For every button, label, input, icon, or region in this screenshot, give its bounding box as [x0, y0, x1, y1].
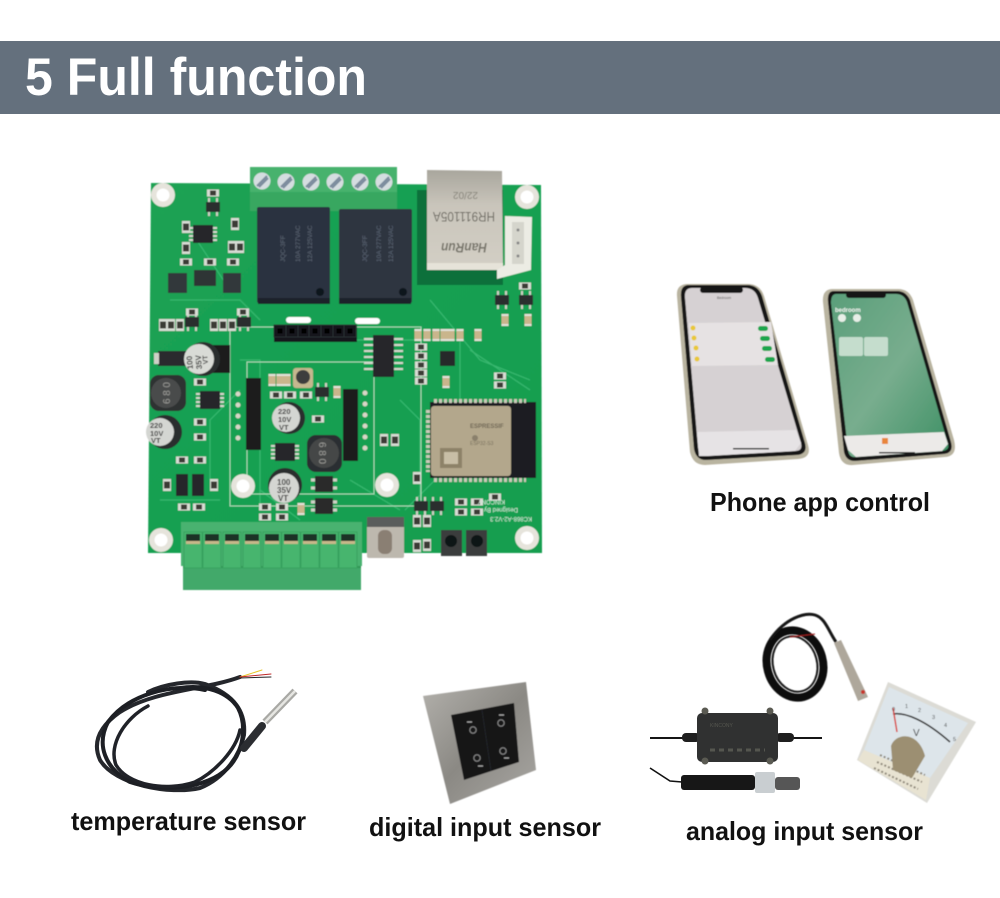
capacitor 220uF centre: 10V — [278, 415, 291, 424]
silkscreen label: KC868-A2-V2.3 — [489, 515, 532, 521]
header banner — [0, 41, 1000, 114]
analog meter: 3 — [932, 715, 935, 721]
temperature sensor — [97, 670, 295, 790]
logic IC and passives — [364, 282, 533, 446]
title: 5 Full function — [25, 48, 367, 107]
RJ45 ethernet jack: HR911105A — [432, 209, 495, 225]
capacitor 100uF centre — [268, 468, 302, 503]
analog meter: 4 — [944, 723, 947, 729]
header strip — [274, 325, 357, 342]
capacitor 220uF left — [146, 415, 182, 449]
relay 2 — [339, 209, 412, 304]
PCB base — [148, 183, 542, 553]
capacitor 100uF top: 100 — [185, 355, 195, 370]
relay 1 — [257, 207, 330, 304]
pressure probe with coiled cable — [759, 614, 868, 704]
top screw terminal — [250, 167, 397, 211]
lower left parts — [163, 378, 218, 510]
relay 2: 10A 277VAC — [376, 225, 383, 262]
phone: bedroom screen — [823, 289, 955, 465]
capacitor 220uF left: 220 — [150, 421, 163, 430]
capacitor 220uF left: 10V — [150, 429, 163, 438]
capacitor 100uF centre: VT — [278, 494, 288, 503]
female pin headers — [236, 378, 368, 461]
analog meter — [857, 682, 976, 803]
digital input switch panel — [423, 682, 536, 804]
phone: settings screen: Bedroom — [717, 296, 731, 300]
capacitor 100uF centre: 35V — [277, 486, 292, 495]
relay 1: 10A 277VAC — [295, 225, 302, 262]
main circuit board photo: Designed By — [484, 506, 518, 512]
relay 1: 12A 125VAC — [307, 225, 314, 262]
ESP32 module: ESPRESSIF — [470, 424, 504, 430]
SMD diodes — [259, 476, 337, 520]
capacitor 100uF top — [184, 342, 230, 376]
RJ45 ethernet jack — [417, 170, 503, 285]
inductor 680 left: 680 — [162, 382, 173, 404]
left power components — [154, 190, 251, 366]
analog meter: 0 — [892, 707, 895, 713]
analog meter: 1 — [905, 704, 908, 710]
phone: settings screen — [677, 284, 809, 465]
mounting holes — [149, 183, 539, 552]
capacitor 220uF centre — [272, 402, 305, 434]
white JST connector — [497, 216, 532, 279]
inductor 680 centre: 680 — [316, 442, 327, 464]
pH electrode — [650, 768, 800, 793]
main circuit board photo — [146, 167, 542, 590]
inductor 680 centre — [307, 435, 342, 472]
main circuit board photo: KINCONY — [478, 498, 505, 504]
label: analog input sensor: analog input sensor — [686, 816, 923, 846]
relay 2: JQC-3FF — [362, 235, 369, 262]
label: digital input sensor: digital input sensor — [369, 812, 601, 842]
transistors and buttons — [413, 472, 501, 556]
ESP32 module: ESP32-S3 — [470, 441, 494, 447]
capacitor 100uF centre: 100 — [277, 478, 291, 487]
analog meter: V — [913, 728, 920, 739]
analog meter: 5 — [953, 737, 956, 743]
RJ45 ethernet jack: 22/02 — [453, 189, 478, 200]
capacitor 220uF left: VT — [151, 436, 161, 445]
analog meter: 2 — [918, 708, 921, 714]
waterproof junction box — [650, 708, 822, 764]
relay 1: JQC-3FF — [280, 235, 287, 262]
inductor 680 left — [150, 375, 186, 411]
capacitor 100uF top: VT — [202, 354, 210, 364]
ESP32 module — [428, 401, 536, 480]
capacitor 100uF top: 35V — [194, 354, 204, 370]
center power parts — [268, 368, 340, 461]
bedroom heading: bedroom — [835, 308, 861, 314]
label: phone app control: Phone app control — [710, 487, 930, 517]
USB-C connector — [367, 517, 404, 558]
capacitor 220uF centre: 220 — [278, 407, 291, 416]
waterproof junction box: KINCONY — [710, 723, 733, 729]
relay 2: 12A 125VAC — [388, 225, 395, 262]
bottom screw terminal — [181, 522, 362, 590]
RJ45 ethernet jack: HanRun — [441, 240, 487, 256]
label: temperature sensor: temperature sensor — [71, 806, 306, 836]
capacitor 220uF centre: VT — [279, 423, 289, 432]
